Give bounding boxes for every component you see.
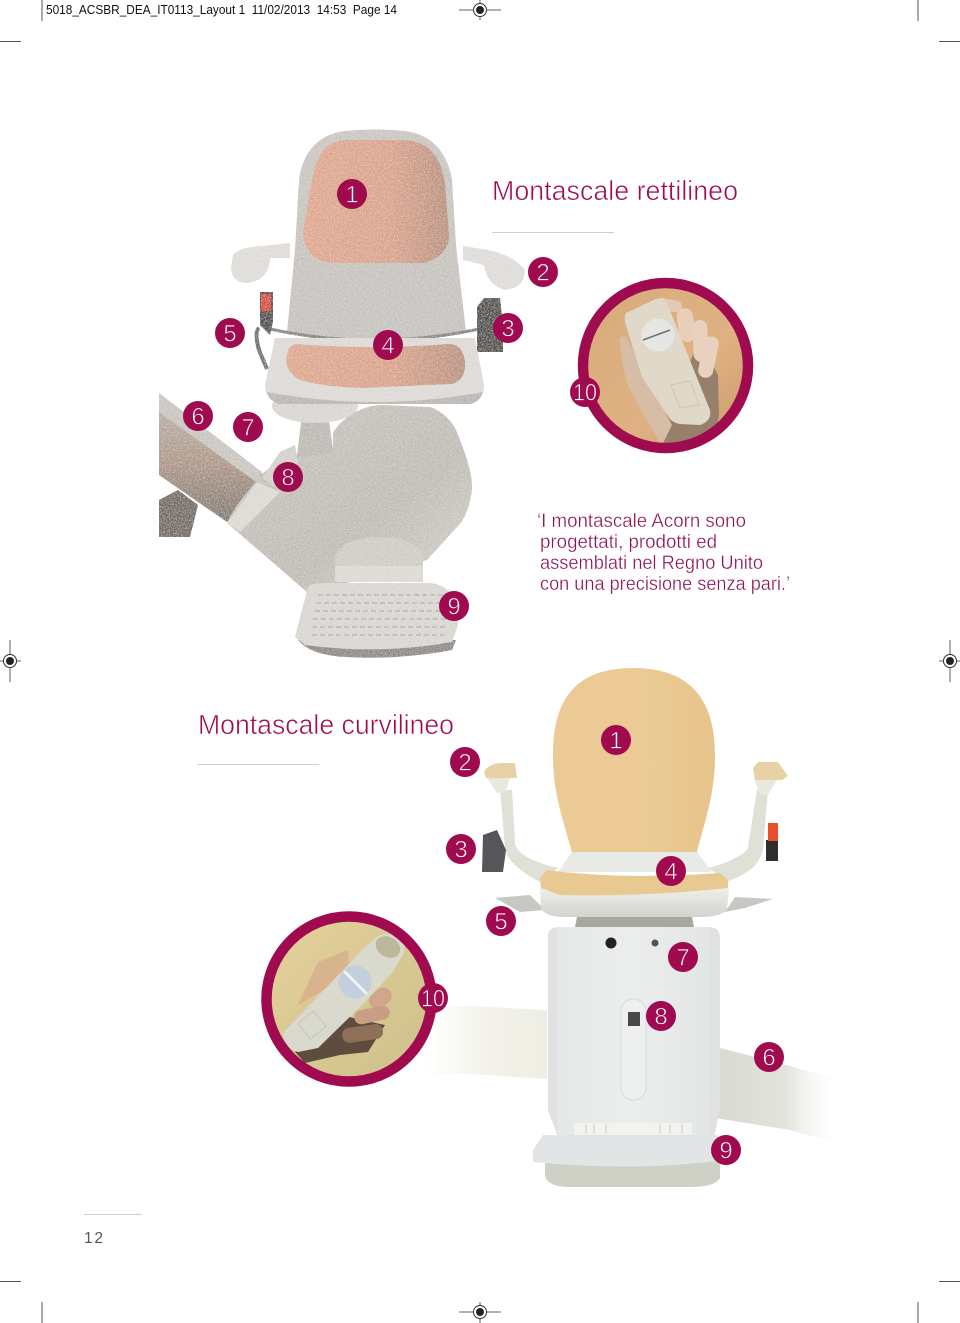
pedestal disc — [272, 389, 358, 423]
seat pan — [265, 338, 484, 404]
registration mark: top — [459, 0, 501, 20]
red switch light — [261, 294, 271, 311]
inset: straight lift remote — [583, 283, 748, 448]
number badges: curved lift — [418, 725, 784, 1165]
column face — [557, 927, 710, 1137]
registration mark: bottom — [459, 1302, 501, 1323]
number badges: curved lift: 5 — [494, 908, 508, 936]
backrest shell — [287, 130, 466, 342]
ring — [583, 283, 748, 448]
seat base — [540, 888, 729, 917]
photo: curved stairlift — [425, 668, 832, 1187]
left hole — [606, 938, 616, 948]
foot hinge — [335, 566, 423, 582]
remote — [283, 934, 404, 1052]
carriage body — [227, 405, 472, 592]
remote button — [642, 318, 674, 352]
number badges: straight lift: 6 — [191, 404, 205, 430]
number badges: straight lift: 9 — [447, 594, 461, 620]
remote button — [338, 966, 372, 998]
backrest — [553, 668, 715, 852]
finger 1 — [658, 298, 682, 312]
photo: straight stairlift — [159, 130, 525, 658]
ring — [266, 916, 432, 1082]
left cable — [256, 328, 267, 369]
number badges: curved lift: 2 — [458, 750, 472, 776]
right hole — [652, 940, 658, 946]
right switch — [766, 840, 778, 861]
heading rule: straight stairlift — [492, 232, 614, 233]
number badges: straight lift: 7 — [241, 414, 255, 442]
right armrest — [463, 246, 525, 290]
number badges: curved lift: 9 — [719, 1138, 733, 1164]
print slug line: 5018_ACSBR_DEA_IT0113_Layout 1 11/02/2013 14:53 Page 14 — [46, 3, 397, 17]
heading: straight stairlift: Montascale rettilineo — [492, 175, 738, 206]
hand back — [298, 950, 350, 1005]
remote button slot — [643, 330, 670, 340]
rail bracket — [159, 490, 198, 537]
rail top track — [159, 393, 262, 482]
right armrest support — [754, 778, 778, 795]
quote text: con una precisione senza pari.’ — [540, 574, 790, 595]
finger a — [369, 988, 392, 1008]
number badges: curved lift: 10 — [421, 986, 445, 1012]
palm — [663, 353, 719, 443]
left arm tube — [500, 790, 558, 882]
right control — [477, 298, 503, 352]
number badges: straight lift: 10 — [573, 380, 597, 406]
number badges: curved lift: 8 — [654, 1004, 668, 1030]
quote text: progettati, prodotti ed — [540, 532, 717, 553]
number badges: curved lift: 7 — [676, 944, 690, 972]
thumb — [620, 336, 672, 445]
finger 2 — [676, 308, 694, 342]
finger 4 — [698, 336, 719, 378]
left armrest support — [487, 778, 510, 793]
dark hand — [295, 1015, 385, 1063]
finger c — [342, 1024, 383, 1043]
finger 3 — [693, 320, 708, 362]
hand and remote — [283, 932, 404, 1063]
foot wing left — [495, 895, 545, 912]
swivel column — [296, 415, 335, 464]
right armrest pad — [753, 762, 788, 780]
left armrest — [231, 243, 290, 283]
remote — [625, 298, 710, 425]
right rail — [715, 1048, 832, 1142]
seat belt bar — [270, 328, 484, 340]
foot lower — [545, 1160, 720, 1187]
hand and remote — [620, 297, 720, 445]
number badges: curved lift: 3 — [454, 836, 468, 864]
footplate lower — [298, 640, 456, 658]
number badges: curved lift: 4 — [664, 858, 678, 886]
carriage end cap — [227, 482, 280, 532]
quote text: assemblati nel Regno Unito — [540, 553, 763, 574]
quote text: ‘I montascale Acorn sono — [537, 511, 746, 532]
number badges: straight lift: 5 — [223, 320, 237, 348]
right arm tube — [708, 790, 768, 881]
heading: curved stairlift: Montascale curvilineo — [198, 709, 454, 740]
seat pad — [286, 344, 465, 388]
number badges: straight lift: 3 — [501, 316, 515, 342]
seat pad — [540, 870, 728, 895]
number badges: curved lift: 6 — [762, 1044, 776, 1072]
backrest pad — [303, 140, 449, 263]
number badges: straight lift: 8 — [281, 464, 295, 492]
page number: 12 — [84, 1230, 103, 1247]
remote hole — [376, 936, 400, 958]
right switch red — [768, 823, 778, 841]
left rail — [425, 1006, 547, 1079]
registration mark: right — [939, 640, 960, 682]
finger b — [354, 1006, 390, 1024]
photo background — [586, 286, 746, 446]
seat pan lower band — [267, 392, 483, 404]
foot wing right — [725, 897, 773, 912]
number badges: straight lift: 2 — [536, 260, 550, 286]
slot switch — [628, 1012, 640, 1026]
remote button slot — [344, 971, 367, 994]
left switch — [260, 292, 273, 335]
photo background — [269, 919, 429, 1079]
page number rule — [84, 1214, 142, 1215]
foot flap — [335, 537, 423, 582]
number badges: straight lift: 4 — [381, 332, 395, 360]
number badges: straight lift — [183, 179, 600, 621]
carriage clamp — [262, 445, 298, 490]
foot plate — [533, 1135, 722, 1167]
inset: curved lift remote — [266, 916, 432, 1082]
backrest lower shell — [558, 852, 712, 872]
number badges: straight lift: 1 — [345, 182, 359, 208]
footplate tread — [312, 595, 446, 635]
left control box — [482, 830, 506, 872]
slot — [621, 999, 646, 1100]
column body — [548, 927, 720, 1137]
remote emblem — [298, 1011, 326, 1039]
quote text — [537, 511, 790, 595]
footplate — [295, 583, 458, 649]
rail — [159, 393, 262, 522]
number badges: curved lift: 1 — [609, 728, 623, 754]
left armrest pad — [484, 763, 517, 778]
heading rule: curved stairlift — [198, 764, 319, 765]
registration mark: left — [0, 640, 21, 682]
carriage top — [575, 917, 694, 927]
remote emblem — [671, 381, 699, 408]
hinges — [574, 1123, 692, 1135]
